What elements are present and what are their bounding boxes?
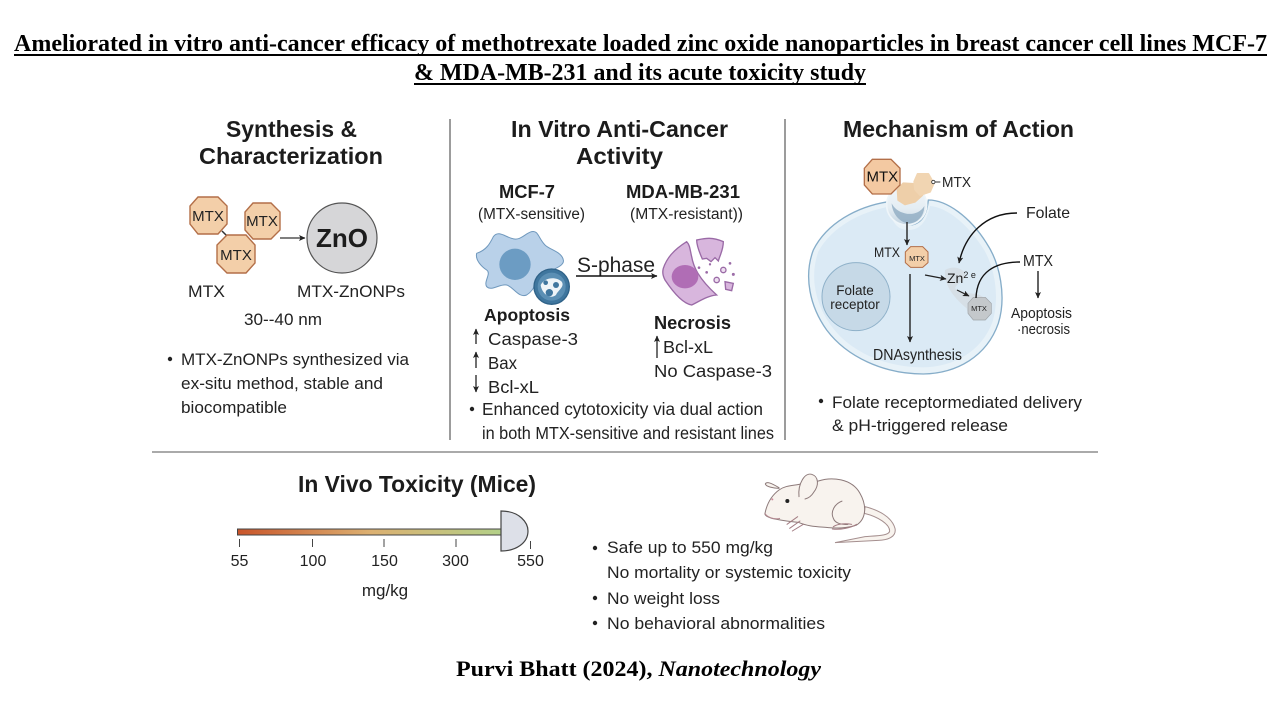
- panel: in vivo toxicity: [231, 471, 895, 633]
- text: toxicity bullets: No behavioral abnormalities: [607, 614, 825, 633]
- title: Ameliorated in vitro anti-cancer efficacy of methotrexate loaded zinc oxide nanoparticles in breast cancer cell lines MCF-7: [14, 31, 1267, 57]
- label: Zn2+: 2 e: [963, 270, 976, 280]
- label: size: 30--40 nm: [244, 310, 322, 329]
- text: apoptosis markers: Apoptosis: [484, 305, 570, 325]
- icon: ZnO nanoparticle: ZnO: [316, 223, 368, 253]
- chart: dose scale: [231, 511, 544, 600]
- label: folate: Folate: [1026, 205, 1070, 222]
- heading: in vitro: Activity: [576, 143, 663, 169]
- text: apoptosis markers: Caspase-3: [488, 329, 578, 349]
- arrow: MTX to ZnO: [280, 237, 305, 239]
- label: MDA-MB-231: [626, 181, 743, 223]
- text: toxicity bullets: [593, 538, 852, 633]
- arrow: to DNA synthesis: [909, 274, 911, 342]
- icon: mouse: [765, 474, 895, 543]
- label: grey MTX: MTX: [971, 304, 987, 313]
- text: synthesis bullet: MTX-ZnONPs synthesized via: [181, 350, 410, 369]
- chart: dose scale: mg/kg: [362, 581, 408, 600]
- chart: dose scale: 550: [517, 553, 544, 570]
- citation: Purvi Bhatt (2024), Nanotechnology: [456, 656, 822, 681]
- text: synthesis bullet: ex-situ method, stable and: [181, 374, 383, 393]
- text: toxicity bullets: Safe up to 550 mg/kg: [607, 538, 773, 557]
- label: MCF-7: (MTX-sensitive): [478, 206, 585, 223]
- label: MCF-7: MCF-7: [499, 182, 555, 202]
- icon: apoptotic MCF-7 cell: [476, 231, 569, 304]
- chart: dose scale: 150: [371, 553, 398, 570]
- chart: dose scale: 300: [442, 553, 469, 570]
- label: small MTX: MTX: [909, 254, 925, 263]
- arrow: MTX to Zn: [925, 275, 946, 279]
- panel: in vitro anti-cancer activity: [470, 116, 774, 443]
- label: MTX in cell: MTX: [874, 244, 901, 260]
- text: in vitro bullet: [470, 399, 774, 443]
- label: folate receptor: [830, 283, 880, 312]
- icon: ZnO nanoparticle: [307, 203, 377, 273]
- text: necrosis markers: [654, 313, 772, 381]
- icon: MTX octagons: MTX: [192, 208, 224, 225]
- text: synthesis bullet: biocompatible: [181, 398, 287, 417]
- diagram: cell mechanism: [809, 200, 1002, 374]
- label: folate receptor: receptor: [830, 297, 880, 312]
- icon: endocytosis vesicle with MTX nanoparticle: [864, 159, 940, 225]
- label: MCF-7: [478, 182, 585, 223]
- label: apoptosis necrosis: ·necrosis: [1017, 322, 1070, 338]
- label: MTX ligand: MTX: [942, 174, 971, 191]
- panel: synthesis and characterization: [168, 116, 410, 417]
- heading: in vivo: In Vivo Toxicity (Mice): [298, 471, 536, 497]
- arrow: folate curve: [959, 213, 1017, 263]
- arrow: MTX to apoptosis: [1037, 271, 1039, 298]
- text: toxicity bullets: No weight loss: [607, 589, 720, 608]
- text: necrosis markers: Bcl-xL: [663, 337, 713, 357]
- heading: synthesis: [199, 116, 383, 169]
- icon: MTX octagons: MTX: [220, 247, 252, 264]
- text: apoptosis markers: Bax: [488, 353, 517, 373]
- label: MTX-ZnONPs: MTX-ZnONPs: [297, 282, 405, 301]
- text: necrosis markers: Necrosis: [654, 313, 731, 333]
- text: apoptosis markers: Bcl-xL: [488, 377, 539, 397]
- text: in vitro bullet: in both MTX-sensitive and resistant lines: [482, 423, 774, 443]
- icon: endocytosis vesicle with MTX nanoparticle: MTX: [867, 168, 898, 185]
- title: & MDA-MB-231 and its acute toxicity study: [414, 60, 866, 86]
- arrow: vesicle to MTX: [906, 222, 908, 245]
- text: necrosis markers: No Caspase-3: [654, 361, 772, 381]
- label: MTX: MTX: [188, 282, 225, 301]
- label: MDA-MB-231: (MTX-resistant)): [630, 206, 743, 223]
- arrow: S-phase: S-phase: [577, 254, 655, 277]
- text: mechanism bullet: [819, 393, 1082, 435]
- label: folate receptor: Folate: [836, 283, 874, 298]
- chart: dose scale: 100: [300, 553, 326, 570]
- icon: MTX octagons: MTX: [246, 213, 278, 230]
- heading: in vitro: [511, 116, 728, 169]
- title: [14, 31, 1267, 86]
- heading: mechanism: Mechanism of Action: [843, 116, 1074, 142]
- arrow: MTX curve: [976, 262, 1020, 298]
- icon: necrotic MDA-MB-231 cell: [663, 238, 734, 305]
- label: MTX outside: MTX: [1023, 253, 1053, 270]
- label: MDA-MB-231: MDA-MB-231: [626, 181, 740, 202]
- heading: synthesis: Synthesis &: [226, 116, 357, 142]
- text: in vitro bullet: Enhanced cytotoxicity via dual action: [482, 399, 763, 419]
- label: Zn2+: Zn: [947, 270, 963, 286]
- text: synthesis bullet: [168, 350, 410, 417]
- arrow: Zn to MTX: [957, 290, 969, 296]
- text: apoptosis markers: [476, 305, 578, 397]
- text: mechanism bullet: & pH-triggered release: [832, 416, 1008, 435]
- chart: dose scale: 55: [231, 553, 248, 570]
- text: toxicity bullets: No mortality or systemic toxicity: [607, 563, 852, 582]
- heading: synthesis: Characterization: [199, 143, 383, 169]
- heading: in vitro: In Vitro Anti-Cancer: [511, 116, 728, 142]
- label: apoptosis necrosis: [1011, 306, 1072, 338]
- panel: mechanism of action: [809, 116, 1082, 435]
- text: mechanism bullet: Folate receptormediated delivery: [832, 393, 1082, 412]
- icon: MTX octagons: [190, 197, 280, 273]
- label: apoptosis necrosis: Apoptosis: [1011, 306, 1072, 322]
- label: DNA synthesis: DNAsynthesis: [873, 347, 962, 364]
